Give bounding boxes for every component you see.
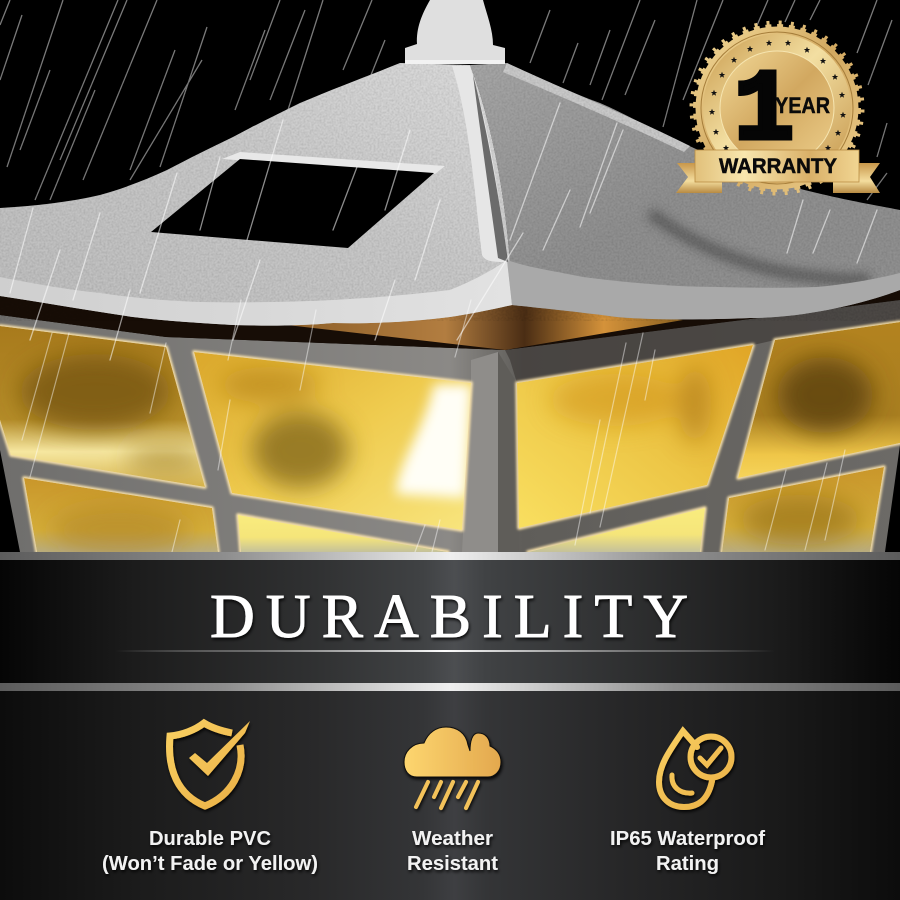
foreground rain streaks xyxy=(10,103,877,552)
panel fills xyxy=(0,322,900,555)
lantern xyxy=(0,0,900,555)
label: durable PVC xyxy=(102,827,318,875)
label: durable PVC: (Won’t Fade or Yellow) xyxy=(102,852,318,875)
top metal bar xyxy=(0,552,900,560)
panel glow outlines xyxy=(0,322,900,552)
roof rim left xyxy=(0,260,512,326)
label: weather resistant xyxy=(407,827,498,875)
label: IP65 waterproof rating xyxy=(610,827,765,875)
roof left slope xyxy=(0,63,512,326)
finial xyxy=(405,0,505,64)
title band xyxy=(0,552,900,691)
icon: water drop with check xyxy=(659,731,732,807)
title: DURABILITY xyxy=(210,583,688,651)
lamp hot spot xyxy=(396,384,472,498)
glowing glass panels xyxy=(0,322,900,555)
seal xyxy=(692,22,862,194)
roof right slope xyxy=(470,63,900,319)
WARRANTY: WARRANTY xyxy=(719,155,837,178)
roof right shadow arc xyxy=(650,213,870,280)
glass shading blobs xyxy=(20,354,873,555)
label: weather resistant: Weather xyxy=(412,827,493,850)
icon: rain cloud xyxy=(404,727,501,808)
label: IP65 waterproof rating: IP65 Waterproof xyxy=(610,827,765,850)
bottom metal bar xyxy=(0,683,900,691)
background rain xyxy=(0,0,892,200)
YEAR: YEAR xyxy=(775,93,830,118)
roof right top highlight xyxy=(503,63,690,152)
features panel xyxy=(0,691,900,900)
roof rim right xyxy=(507,260,900,319)
roof corner ridge xyxy=(452,66,507,262)
corner post xyxy=(462,352,519,552)
ring stars xyxy=(709,40,846,151)
lantern frame xyxy=(0,300,900,552)
warranty badge xyxy=(676,22,880,194)
label: IP65 waterproof rating: Rating xyxy=(656,852,719,875)
title underline xyxy=(115,650,775,652)
big numeral 1: 1 xyxy=(734,56,794,169)
icon: shield with check xyxy=(170,721,250,806)
label: weather resistant: Resistant xyxy=(407,852,498,875)
ribbon xyxy=(676,150,880,193)
roof surface grain xyxy=(0,63,900,321)
night background xyxy=(0,0,900,560)
solar panel xyxy=(151,152,445,248)
frame top shadow xyxy=(505,300,900,383)
roof underside xyxy=(0,286,900,350)
label: durable PVC: Durable PVC xyxy=(149,827,271,850)
